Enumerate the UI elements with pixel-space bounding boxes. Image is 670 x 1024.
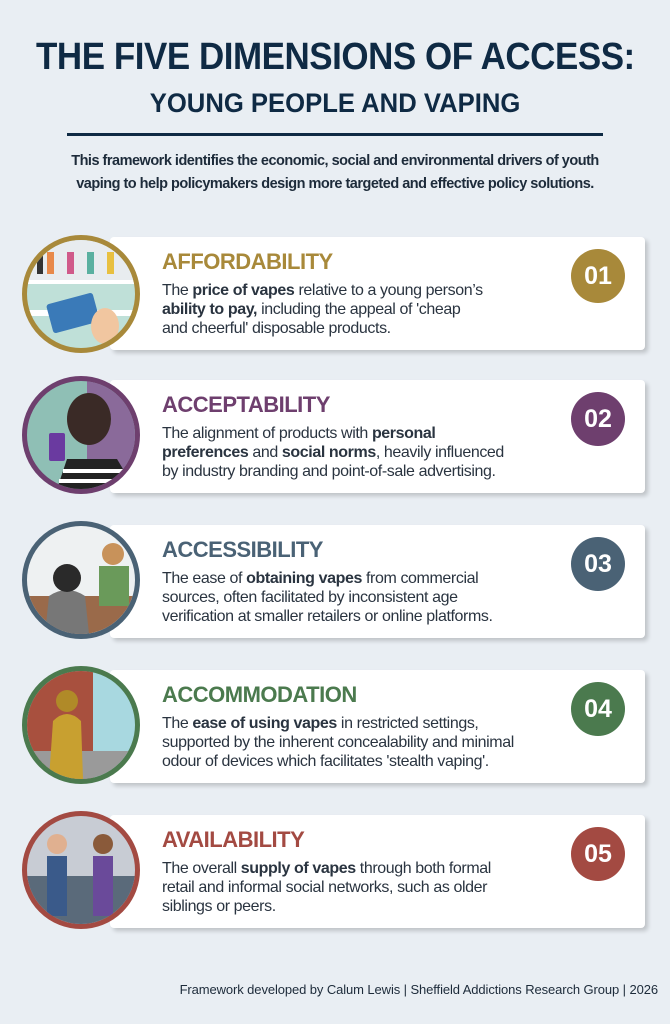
text: by industry branding and point-of-sale advertising. [162,463,496,480]
panel: availability [110,815,645,928]
text [162,715,514,770]
number badge [571,682,625,736]
text: The overall supply of vapes through both formal [162,860,491,877]
heading: ACCESSIBILITY [162,537,323,562]
text: sources, often facilitated by inconsistent age [162,589,458,606]
heading: ACCOMMODATION [162,682,357,707]
text: ability to pay, including the appeal of 'cheap [162,301,460,318]
icon: availability illustration [22,811,140,929]
panel: affordability [110,237,645,350]
text: The ease of obtaining vapes from commercial [162,570,478,587]
text: The alignment of products with personal [162,425,435,442]
text: supported by the inherent concealability and minimal [162,734,514,751]
icon: accommodation illustration [22,666,140,784]
number badge [571,827,625,881]
number badge [571,537,625,591]
panel: acceptability [110,380,645,493]
text: verification at smaller retailers or online platforms. [162,608,493,625]
intro text [71,153,599,192]
number badge: 03 [584,550,612,578]
text: siblings or peers. [162,898,276,915]
heading: AFFORDABILITY [162,249,333,274]
title: THE FIVE DIMENSIONS OF ACCESS: [36,36,634,78]
text: The price of vapes relative to a young person’s [162,282,483,299]
text: retail and informal social networks, such as older [162,879,487,896]
text: preferences and social norms, heavily influenced [162,444,504,461]
icon: affordability illustration [22,235,140,353]
icon: acceptability illustration [22,376,140,494]
heading: ACCEPTABILITY [162,392,330,417]
panel: accommodation [110,670,645,783]
text [162,860,491,915]
icon: accessibility illustration [22,521,140,639]
text: odour of devices which facilitates 'stealth vaping'. [162,753,489,770]
heading: AVAILABILITY [162,827,304,852]
number badge: 05 [584,840,612,868]
footer: Framework developed by Calum Lewis | Sheffield Addictions Research Group | 2026 [180,982,658,997]
number badge: 04 [584,695,612,723]
text: and cheerful' disposable products. [162,320,391,337]
number badge [571,249,625,303]
panel: accessibility [110,525,645,638]
text [162,425,504,480]
subtitle: YOUNG PEOPLE AND VAPING [150,88,520,118]
number badge: 01 [584,262,612,290]
number badge: 02 [584,405,612,433]
text [162,282,483,337]
intro text: This framework identifies the economic, social and environmental drivers of youth [71,153,599,169]
text: The ease of using vapes in restricted settings, [162,715,478,732]
intro text: vaping to help policymakers design more targeted and effective policy solutions. [76,176,594,192]
number badge [571,392,625,446]
text [162,570,493,625]
